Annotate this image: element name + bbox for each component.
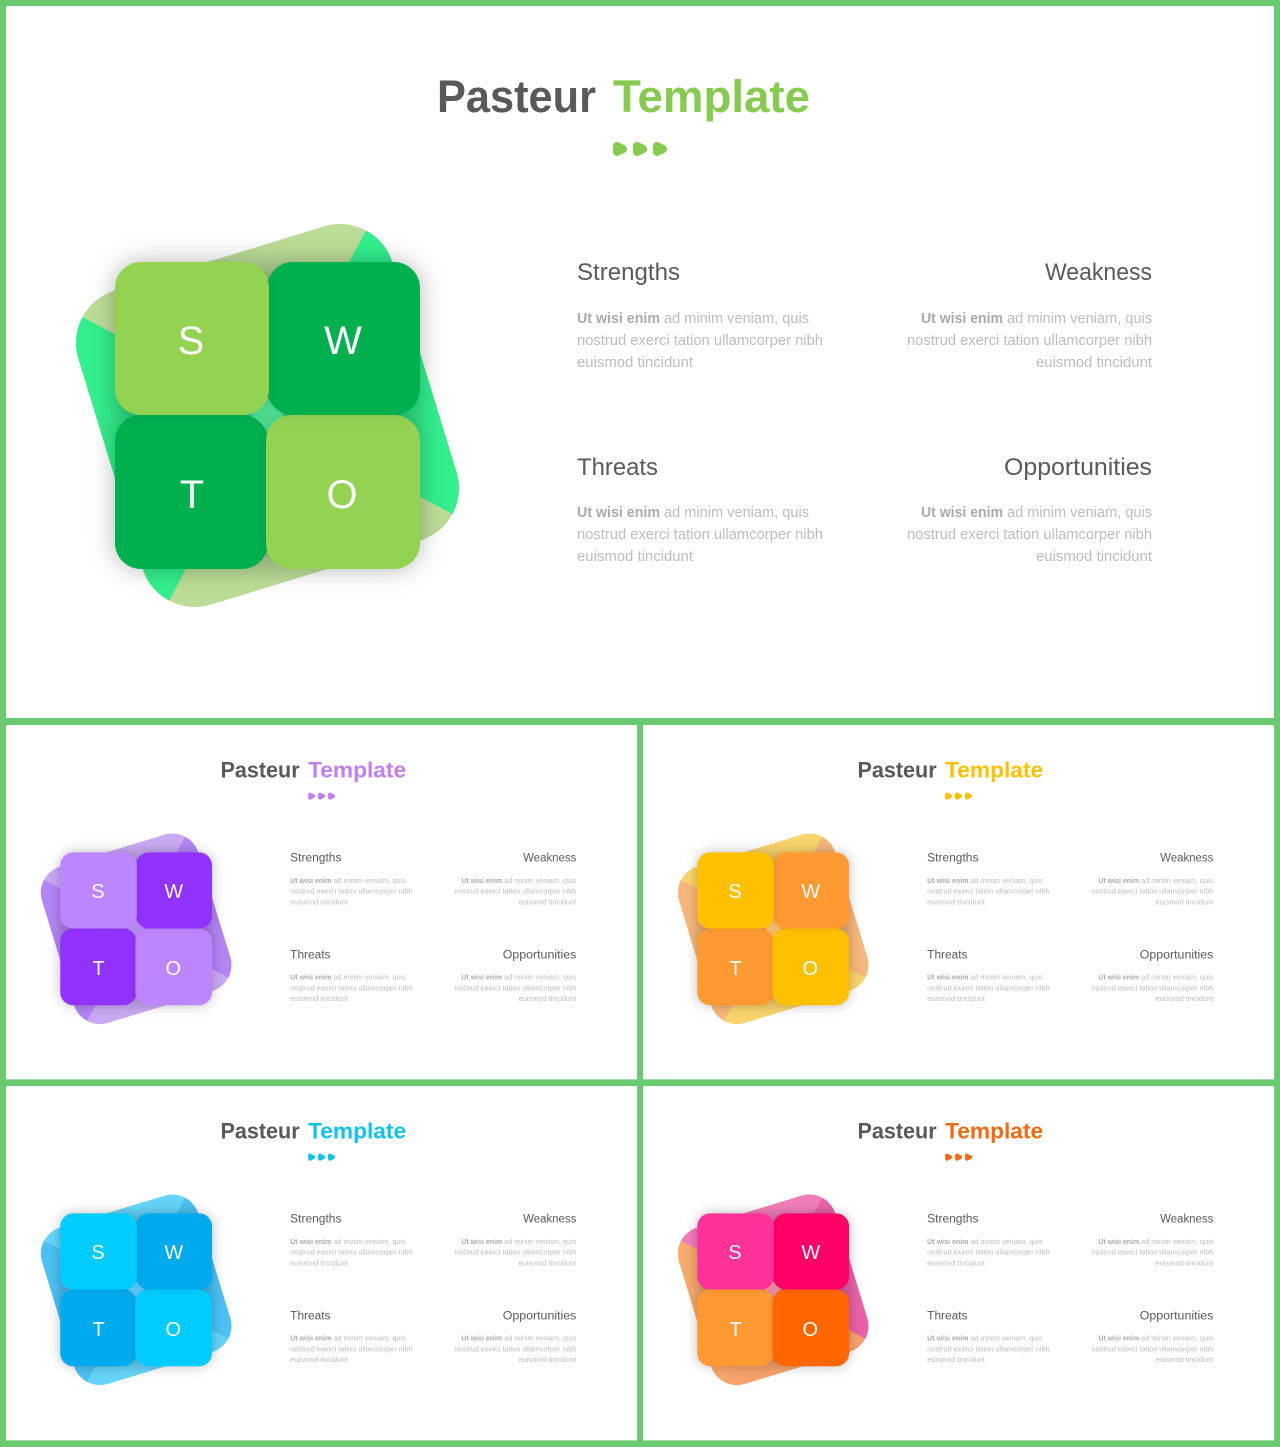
text block: Weakness [1091,850,1214,907]
text block: Opportunities: ad minim veniam, quis [1141,972,1214,981]
tile T: T [92,1319,105,1341]
title [437,71,810,122]
text block: Strengths: Strengths [927,1211,978,1225]
text block: Strengths: nostrud exerci tation ullamcorper nibh [927,887,1050,896]
tile S [697,1213,774,1290]
title: Pasteur [221,1119,300,1144]
text block: Strengths: Ut wisi enim [290,876,332,885]
text block: Weakness: nostrud exerci tation ullamcorper nibh [1091,1248,1213,1257]
text block: Strengths: nostrud exerci tation ullamcorper nibh [290,1248,413,1257]
text block: Strengths: nostrud exerci tation ullamcorper nibh [927,1248,1050,1257]
text block: Strengths: euismod tincidunt [927,898,986,907]
SWOT tile grid [60,852,212,1005]
text block: Opportunities: Ut wisi enim [1098,1333,1140,1342]
text block: Threats: Threats [927,1308,968,1322]
text block: Strengths: ad minim veniam, quis [970,876,1043,885]
text block: Weakness [907,259,1153,371]
text block: Strengths: Strengths [290,1211,341,1225]
SWOT tile grid [697,1213,849,1366]
tile T [115,415,268,569]
text block: Strengths: ad minim veniam, quis [970,1237,1043,1246]
text block: Weakness: Weakness [523,1211,576,1225]
text block: Weakness: Ut wisi enim [461,876,503,885]
text block: Weakness [454,1211,577,1268]
title [221,1119,406,1144]
tile S: S [728,1242,742,1264]
text block: Opportunities: ad minim veniam, quis [1007,504,1152,521]
text block: Strengths: ad minim veniam, quis [333,1237,406,1246]
text block: Weakness: euismod tincidunt [1156,898,1214,907]
text block: Threats: Ut wisi enim [290,1333,332,1342]
text block: Opportunities: Opportunities [503,947,576,961]
text block: Threats: ad minim veniam, quis [333,972,406,981]
text block: Threats: nostrud exerci tation ullamcorper nibh [290,1344,413,1353]
text block: Strengths [290,850,413,907]
text block: Threats: euismod tincidunt [290,994,349,1003]
text block: Opportunities [454,947,577,1003]
text block: Threats: ad minim veniam, quis [970,1333,1043,1342]
text block: Weakness: Weakness [1160,850,1213,864]
tile S: S [91,1242,105,1264]
tile W [136,852,212,929]
text block: Threats: ad minim veniam, quis [970,972,1043,981]
text block: Opportunities: Ut wisi enim [461,972,503,981]
text block: Strengths [927,850,1050,907]
title: Pasteur [221,758,300,783]
text block: Weakness [1091,1211,1214,1268]
text block: Opportunities: nostrud exerci tation ullamcorper nibh [454,1344,576,1353]
text block: Threats: nostrud exerci tation ullamcorper nibh [577,526,823,543]
text block: Opportunities: Ut wisi enim [921,504,1003,521]
text block: Strengths: euismod tincidunt [927,1259,986,1268]
tile W [773,852,849,929]
text block: Threats: Threats [290,947,331,961]
tile T: T [729,958,742,980]
text block: Threats [927,947,1050,1003]
text block: Opportunities: Ut wisi enim [1098,972,1140,981]
rotated backing shape [40,1194,232,1386]
tile S [697,852,774,929]
title: Template [945,1119,1043,1144]
text block: Weakness: Weakness [1045,259,1152,286]
rotated backing shape [40,834,232,1024]
text block: Opportunities [1091,947,1214,1003]
text block: Threats [927,1308,1050,1364]
text block: Strengths: Strengths [290,850,341,864]
panel: orange slide [643,725,1274,1079]
icon: three arrows [947,1156,970,1159]
text block: Weakness: Ut wisi enim [461,1237,503,1246]
text block: Weakness: nostrud exerci tation ullamcorper nibh [454,887,576,896]
icon: three arrows [617,146,663,152]
tile T [697,1290,773,1366]
title: Pasteur [858,1119,937,1144]
text block: Strengths: euismod tincidunt [290,1259,349,1268]
text block: Strengths: Ut wisi enim [577,310,660,327]
text block: Threats: euismod tincidunt [927,994,986,1003]
text block: Opportunities: euismod tincidunt [1156,1355,1214,1364]
title: Pasteur [858,758,937,783]
title [858,758,1043,783]
title: Template [308,1119,406,1144]
tile W: W [164,1242,183,1264]
tile O [135,1290,212,1366]
title [221,758,406,783]
SWOT tile grid [60,1213,212,1366]
text block: Opportunities [1091,1308,1214,1364]
text block: Weakness: ad minim veniam, quis [1007,310,1152,327]
title: Template [308,758,406,783]
text block: Weakness: ad minim veniam, quis [1141,1237,1214,1246]
text block: Opportunities: Opportunities [503,1308,576,1322]
text block: Weakness: nostrud exerci tation ullamcorper nibh [907,332,1152,349]
text block: Weakness: Ut wisi enim [1098,876,1140,885]
text block: Threats: Ut wisi enim [290,972,332,981]
text block: Strengths: euismod tincidunt [577,354,694,371]
tile O: O [326,473,358,517]
panel: pink and orange slide [643,1086,1274,1440]
tile O [772,1290,849,1366]
tile T [60,1290,136,1366]
SWOT tile grid [115,262,420,569]
rotated backing shape [678,834,868,1024]
text block: Opportunities: euismod tincidunt [519,994,577,1003]
text block: Threats: ad minim veniam, quis [333,1333,406,1342]
text block: Opportunities: ad minim veniam, quis [504,972,577,981]
text block: Opportunities: nostrud exerci tation ullamcorper nibh [454,983,576,992]
panel: blue slide [6,1086,637,1440]
text block: Opportunities [907,454,1153,565]
tile W: W [801,881,820,903]
text block: Weakness: nostrud exerci tation ullamcorper nibh [1091,887,1213,896]
tile T [60,929,136,1005]
panel: green main slide [6,6,1274,718]
tile W [136,1213,212,1290]
text block: Opportunities: nostrud exerci tation ullamcorper nibh [1091,983,1213,992]
text block: Opportunities: euismod tincidunt [519,1355,577,1364]
tile O: O [165,1319,181,1341]
text block: Weakness: Ut wisi enim [1098,1237,1140,1246]
text block: Threats: Threats [927,947,968,961]
text block: Opportunities [454,1308,577,1364]
text block: Weakness [454,850,577,907]
text block: Weakness: euismod tincidunt [519,1259,577,1268]
tile O [135,929,212,1005]
tile S: S [91,881,105,903]
text block: Strengths: euismod tincidunt [290,898,349,907]
text block: Threats [290,947,413,1003]
title: Pasteur [437,71,596,122]
text block: Threats: ad minim veniam, quis [664,504,809,521]
text block: Strengths: ad minim veniam, quis [333,876,406,885]
text block: Strengths: nostrud exerci tation ullamcorper nibh [290,887,413,896]
text block: Threats: Threats [577,454,658,481]
tile O [772,929,849,1005]
tile T: T [180,473,204,517]
text block: Weakness: ad minim veniam, quis [1141,876,1214,885]
text block: Opportunities: Opportunities [1140,947,1213,961]
tile S: S [178,319,204,363]
tile S [115,262,269,415]
rotated backing shape [76,224,459,607]
tile W: W [164,881,183,903]
text block: Weakness: euismod tincidunt [519,898,577,907]
text block: Threats: euismod tincidunt [290,1355,349,1364]
text block: Strengths: ad minim veniam, quis [664,310,809,327]
rotated backing shape [678,1194,868,1386]
text block: Opportunities: Opportunities [1140,1308,1213,1322]
SWOT tile grid [697,852,849,1005]
tile T [697,929,773,1005]
text block: Opportunities: nostrud exerci tation ullamcorper nibh [1091,1344,1213,1353]
text block: Opportunities: euismod tincidunt [1156,994,1214,1003]
text block: Threats: euismod tincidunt [927,1355,986,1364]
text block: Threats: nostrud exerci tation ullamcorper nibh [927,1344,1050,1353]
text block: Strengths: Strengths [577,259,680,286]
text block: Threats: nostrud exerci tation ullamcorper nibh [290,983,413,992]
text block: Threats [577,454,823,565]
title: Template [613,71,810,122]
text block: Weakness: ad minim veniam, quis [504,1237,577,1246]
title: Template [945,758,1043,783]
text block: Weakness: euismod tincidunt [1036,354,1153,371]
text block: Opportunities: Opportunities [1004,454,1152,481]
text block: Strengths [927,1211,1050,1268]
text block: Opportunities: euismod tincidunt [1036,548,1153,565]
text block: Weakness: Ut wisi enim [921,310,1003,327]
icon: three arrows [947,795,970,798]
text block: Weakness: Weakness [523,850,576,864]
tile W [267,262,420,415]
tile W: W [324,319,362,363]
text block: Threats: Threats [290,1308,331,1322]
tile S [60,1213,137,1290]
text block: Threats: Ut wisi enim [927,1333,969,1342]
text block: Threats: euismod tincidunt [577,548,694,565]
icon: three arrows [310,795,333,798]
tile O: O [802,1319,818,1341]
text block: Opportunities: Ut wisi enim [461,1333,503,1342]
text block: Weakness: ad minim veniam, quis [504,876,577,885]
text block: Strengths [577,259,823,371]
tile W: W [801,1242,820,1264]
tile W [773,1213,849,1290]
text block: Weakness: nostrud exerci tation ullamcorper nibh [454,1248,576,1257]
text block: Strengths [290,1211,413,1268]
tile O: O [802,958,818,980]
tile T: T [92,958,105,980]
text block: Opportunities: ad minim veniam, quis [1141,1333,1214,1342]
text block: Threats: Ut wisi enim [577,504,660,521]
text block: Strengths: Strengths [927,850,978,864]
tile O [266,415,420,569]
icon: three arrows [310,1156,333,1159]
text block: Weakness: euismod tincidunt [1156,1259,1214,1268]
tile S [60,852,137,929]
tile T: T [729,1319,742,1341]
text block: Threats [290,1308,413,1364]
text block: Strengths: Ut wisi enim [290,1237,332,1246]
text block: Opportunities: nostrud exerci tation ullamcorper nibh [907,526,1152,543]
text block: Weakness: Weakness [1160,1211,1213,1225]
text block: Strengths: nostrud exerci tation ullamcorper nibh [577,332,823,349]
panel: purple slide [6,725,637,1079]
tile O: O [165,958,181,980]
title [858,1119,1043,1144]
text block: Threats: Ut wisi enim [927,972,969,981]
tile S: S [728,881,742,903]
text block: Strengths: Ut wisi enim [927,1237,969,1246]
text block: Threats: nostrud exerci tation ullamcorper nibh [927,983,1050,992]
text block: Opportunities: ad minim veniam, quis [504,1333,577,1342]
text block: Strengths: Ut wisi enim [927,876,969,885]
